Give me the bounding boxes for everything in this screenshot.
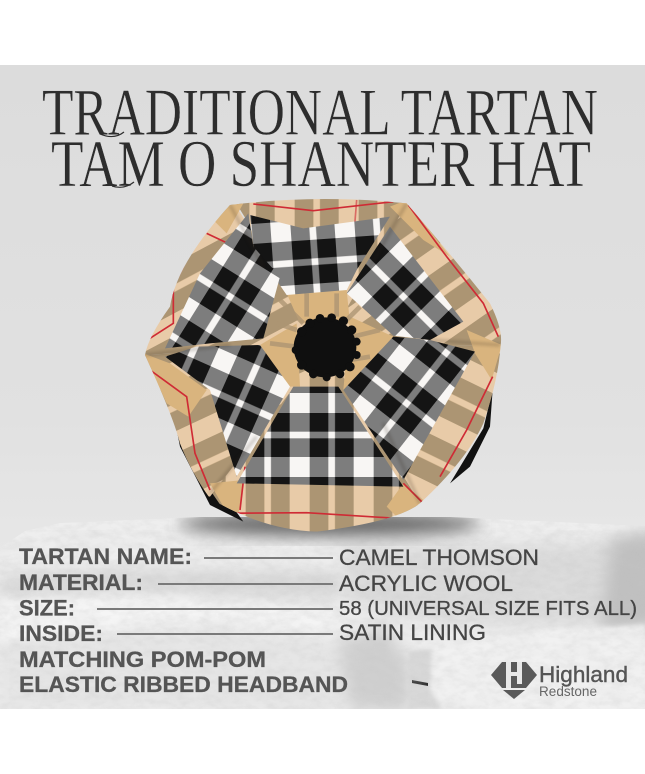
- row: material: ACRYLIC WOOL: [339, 571, 513, 596]
- feature: elastic ribbed headband: ELASTIC RIBBED HEADBAND: [19, 672, 348, 697]
- panel: lower right: [343, 337, 475, 480]
- row: material: [19, 570, 513, 596]
- panel: bottom: [237, 387, 403, 487]
- pom-pom: [292, 313, 361, 381]
- outer camel sectors: [140, 193, 507, 533]
- row: tartan name: [19, 544, 539, 570]
- row: inside: [19, 620, 486, 646]
- row: tartan name: CAMEL THOMSON: [339, 545, 539, 570]
- hub stripes: [270, 293, 380, 360]
- shadow under hat: [180, 512, 480, 536]
- title: [42, 76, 598, 201]
- row: material: MATERIAL:: [19, 570, 143, 595]
- logo mark: [491, 662, 537, 699]
- row: size: SIZE:: [19, 596, 75, 620]
- logo subtitle: Redstone: [539, 684, 597, 699]
- panel: upper left: [165, 213, 280, 348]
- hat illustration: [140, 193, 507, 533]
- camel corner patches: [143, 200, 502, 520]
- red lines: [150, 200, 498, 518]
- spec table: [19, 544, 637, 697]
- crease shading: [145, 203, 500, 503]
- panel: upper right: [347, 227, 463, 340]
- panel: top: [250, 215, 390, 295]
- panel: lower left: [165, 345, 290, 477]
- row: inside: SATIN LINING: [339, 620, 486, 645]
- hat body with sectors: [140, 193, 507, 533]
- row: tartan name: TARTAN NAME:: [19, 544, 192, 569]
- inner check panels: [165, 213, 475, 487]
- logo wordmark: Highland: [539, 662, 628, 687]
- stone shading patches: [0, 530, 645, 709]
- feature: matching pom-pom: MATCHING POM-POM: [19, 647, 266, 672]
- row: size: 58 (UNIVERSAL SIZE FITS ALL): [339, 598, 637, 620]
- row: size: [19, 596, 637, 620]
- stone plinth: [0, 510, 645, 710]
- row: inside: INSIDE:: [19, 621, 103, 646]
- hat dark underside: [172, 390, 493, 522]
- logo: Highland Redstone: [491, 662, 628, 699]
